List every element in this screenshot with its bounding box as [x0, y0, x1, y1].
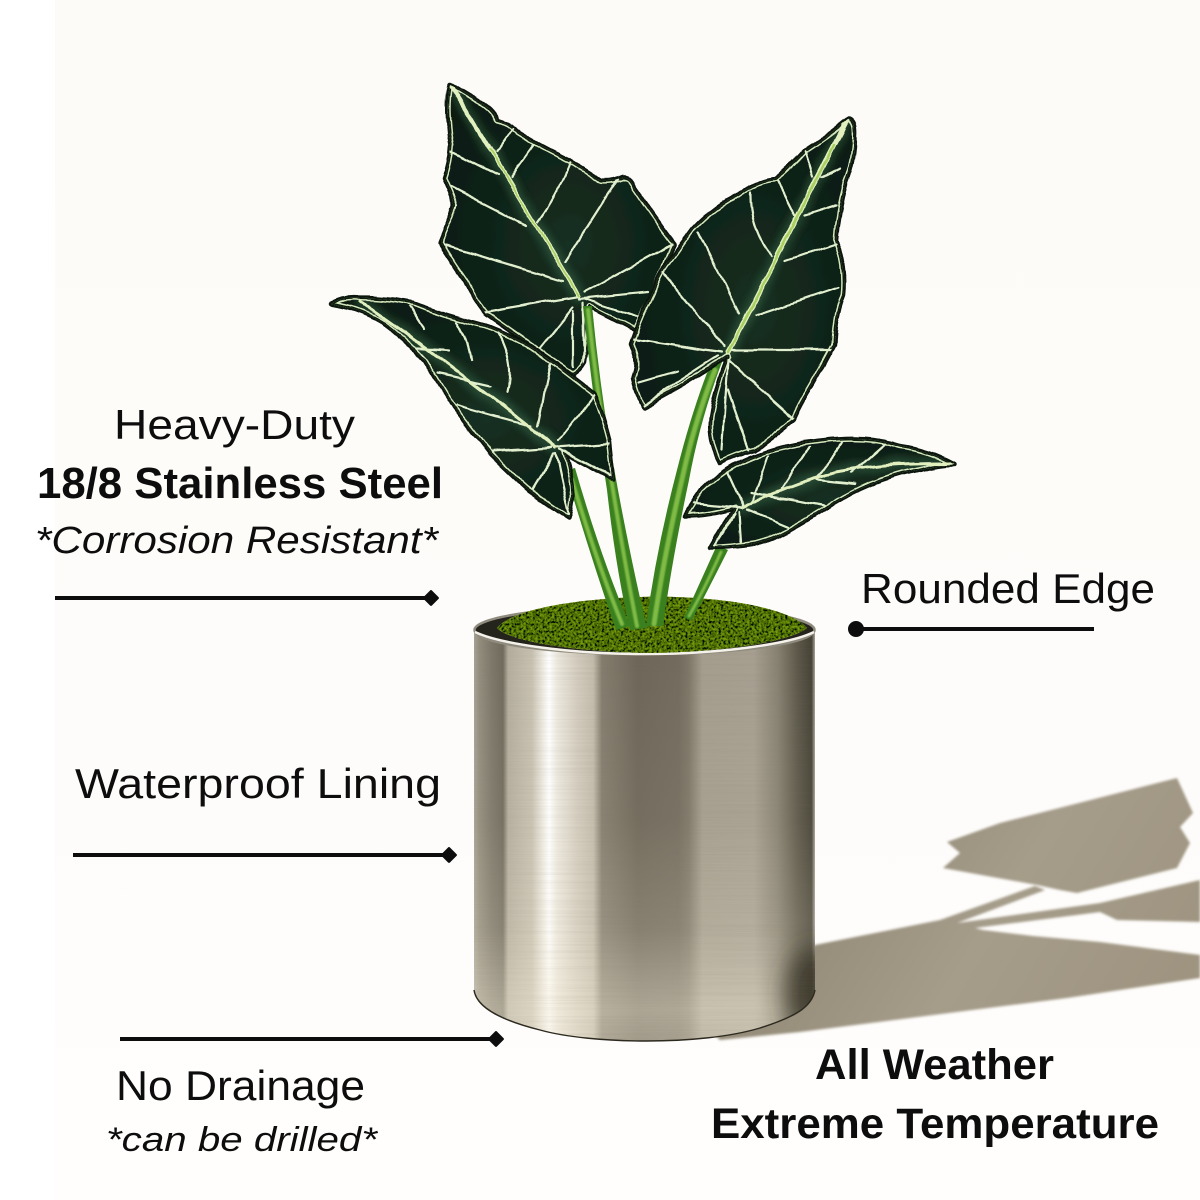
leader line: waterproof lining — [73, 847, 457, 863]
planter: stainless steel pot — [473, 611, 816, 1042]
callout: Rounded Edge: Rounded Edge — [861, 565, 1155, 612]
pot rim — [474, 606, 814, 654]
callout: Heavy-Duty 18/8 Stainless Steel: *Corrosion Resistant* — [35, 520, 439, 562]
callout: No Drainage: *can be drilled* — [106, 1121, 379, 1159]
pot body — [474, 632, 815, 1040]
callout: All Weather Extreme Temperature: Extreme Temperature — [711, 1100, 1159, 1148]
stem: upper left leaf — [583, 306, 647, 630]
pot rim front highlight — [475, 632, 814, 654]
callout: Waterproof Lining: Waterproof Lining — [75, 760, 441, 807]
leaf: upper left — [440, 84, 674, 375]
stem: upper right leaf — [646, 360, 722, 626]
callout: Heavy-Duty 18/8 Stainless Steel — [35, 401, 443, 562]
stem: lower right leaf — [684, 545, 728, 620]
stem: left leaf — [565, 468, 630, 630]
leader line: rounded edge — [848, 621, 1094, 637]
leader line: no drainage — [120, 1031, 504, 1047]
leaf: lower right — [685, 439, 954, 548]
leaf: left — [331, 298, 614, 518]
cast shadow of plant and pot — [700, 778, 1200, 1040]
moss soil — [497, 597, 807, 653]
leaf: upper right — [631, 119, 855, 463]
callout: All Weather Extreme Temperature — [711, 1041, 1159, 1148]
callout: No Drainage: No Drainage — [116, 1062, 365, 1109]
callout: No Drainage — [106, 1062, 379, 1159]
leader line: stainless steel — [55, 590, 439, 606]
callout: All Weather Extreme Temperature: All Weather — [815, 1041, 1054, 1089]
callout: Heavy-Duty 18/8 Stainless Steel: 18/8 Stainless Steel — [37, 459, 443, 508]
pot base edge — [474, 990, 815, 1041]
callout: Heavy-Duty 18/8 Stainless Steel: Heavy-Duty — [114, 401, 355, 448]
